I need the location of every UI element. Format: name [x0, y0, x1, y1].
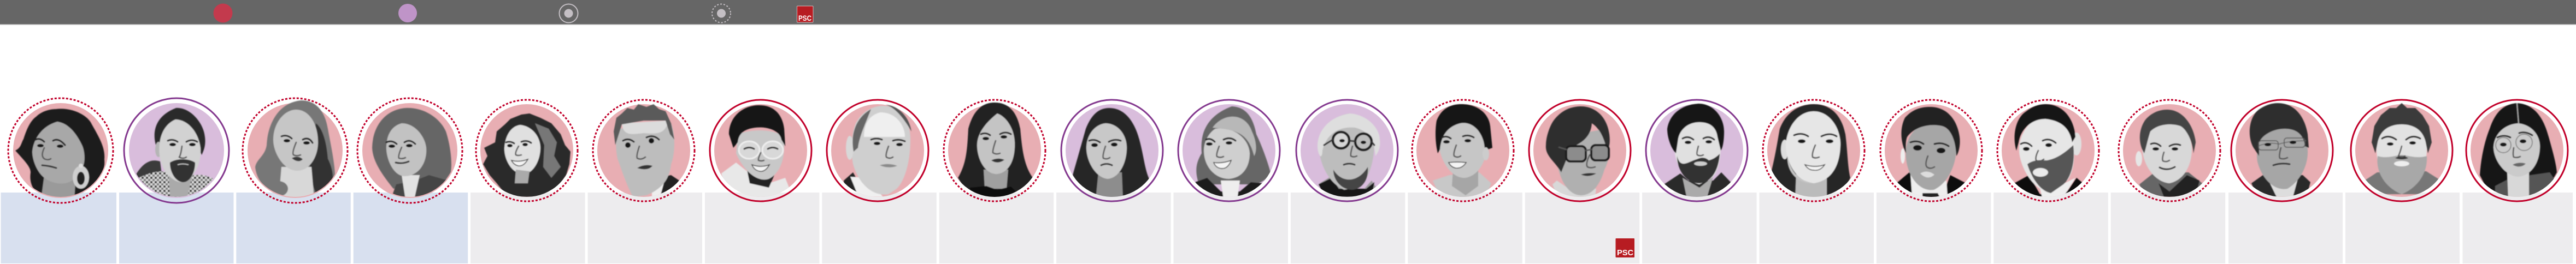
portrait 21: man with grey curly hair and full beard [2351, 100, 2453, 201]
portrait 4: woman with wavy grey-brown hair [357, 98, 462, 203]
legend icon: red dot [213, 3, 233, 23]
row of background panels [1, 193, 2573, 263]
portrait 2: man with ponytail, goatee and plaid shirt [124, 98, 229, 203]
legend icon: lilac dot [398, 4, 417, 22]
portrait 20: man with dark hair and thin glasses in suit [2231, 100, 2333, 201]
header bar [0, 0, 2576, 25]
panel icon: PSC logo [1615, 238, 1634, 257]
portrait 16: smiling woman with long dark hair [1763, 100, 1865, 201]
legend icon: dashed ring [712, 4, 731, 23]
portrait 12: white-haired man with heavy dark glasses [1296, 100, 1398, 201]
portrait 11: smiling woman with highlighted bob [1178, 100, 1280, 201]
portrait 6: man with short grey spiky hair [593, 100, 695, 201]
portrait 17: man with slicked hair in dark suit [1880, 100, 1982, 201]
portrait 19: smiling man with receding hair [2119, 100, 2220, 201]
portrait 15: bearded man with dark hair in jacket [1646, 100, 1748, 201]
portrait 14: man with dark fringe and glasses [1529, 100, 1631, 201]
portrait 1: woman with dark wavy hair and earring [8, 98, 113, 203]
portrait 18: bearded man in suit [1997, 100, 2099, 201]
portrait 8: balding man in suit [827, 100, 928, 201]
legend icon: solid ring [560, 4, 578, 23]
portrait 3: woman with shoulder-length blonde hair [243, 98, 348, 203]
legend icon: PSC logo: PSC [798, 14, 811, 22]
portrait 10: young woman with long dark hair [1061, 100, 1163, 201]
portrait 7: smiling woman with short dark hair and clear glasses [710, 100, 811, 201]
legend icon: PSC logo [797, 6, 813, 22]
portrait 13: woman with short black hair [1412, 100, 1514, 201]
portrait 9: woman with long straight dark hair [944, 100, 1045, 201]
portrait 5: smiling woman with long curly hair [476, 100, 578, 201]
portrait 22: woman with long dark parted hair and glasses [2466, 100, 2568, 201]
panel icon: PSC logo: PSC [1617, 248, 1633, 257]
